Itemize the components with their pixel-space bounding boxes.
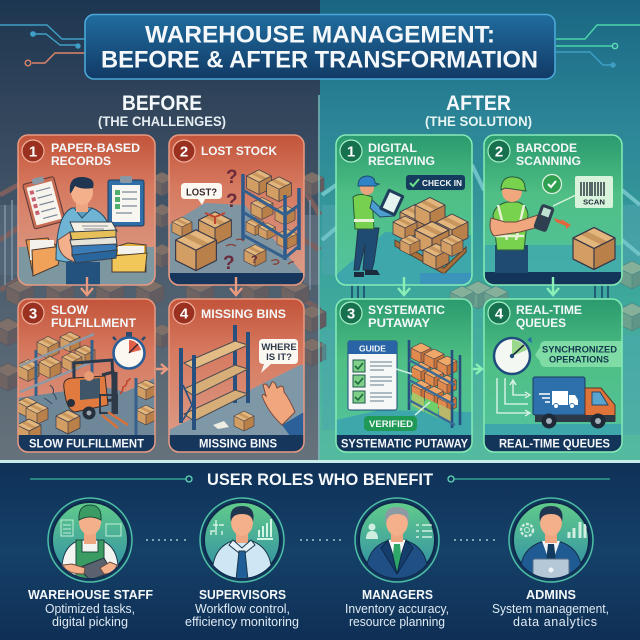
icon: delivery van — [539, 391, 578, 408]
hand — [262, 382, 304, 436]
icon: stopwatch — [113, 332, 145, 368]
number badge 3 — [22, 302, 44, 324]
number badge 1 — [22, 140, 44, 162]
number badge 4: 4 — [495, 306, 504, 322]
heading: after — [425, 92, 532, 129]
arrow: 2 to 4 — [230, 277, 242, 295]
shelf with orange boxes — [409, 340, 460, 428]
background warehouse: after side — [322, 165, 640, 435]
role description: Optimized tasks, — [45, 602, 135, 616]
panel: systematic putaway — [336, 299, 472, 452]
arrow: 1 to 3 — [81, 277, 93, 295]
panel outline — [18, 135, 155, 285]
panel title: REAL-TIME — [516, 303, 582, 317]
floor — [18, 378, 154, 435]
panel title: MISSING BINS — [201, 307, 286, 321]
callout: where is it: IS IT? — [266, 352, 292, 363]
heading: after: (THE SOLUTION) — [425, 114, 532, 129]
avatar: supervisor — [200, 498, 284, 590]
panel title: PUTAWAY — [368, 316, 430, 330]
panel title — [368, 303, 445, 330]
panel outline — [336, 299, 472, 452]
panel title: SCANNING — [516, 154, 581, 168]
arrow: after 1 to 3 — [398, 277, 410, 295]
panel title — [51, 141, 140, 168]
role description — [185, 602, 299, 629]
scan beam — [553, 195, 576, 206]
panel title: RECEIVING — [368, 154, 435, 168]
badge: check in — [406, 175, 465, 190]
flow arrows — [497, 378, 530, 416]
number badge 4 — [488, 302, 510, 324]
role label: ADMINS — [526, 588, 576, 602]
icon: left clipboard — [22, 173, 65, 229]
title banner: WAREHOUSE MANAGEMENT: — [145, 22, 495, 48]
small open box and paper — [213, 411, 254, 431]
bottom strip: MISSING BINS — [199, 438, 277, 450]
worker with paper stack — [56, 177, 117, 290]
role description: System management, — [492, 602, 609, 616]
heading: before — [98, 92, 226, 129]
heading accent left — [30, 476, 192, 482]
callout: lost — [181, 183, 222, 205]
background warehouse: before side — [0, 172, 326, 391]
bottom strip: REAL-TIME QUEUES — [499, 438, 610, 450]
avatar: manager — [355, 498, 439, 590]
question marks: ? — [223, 253, 235, 274]
panel title: SLOW — [51, 303, 89, 317]
question marks: ? — [226, 191, 238, 212]
role description — [492, 602, 609, 629]
icon: right clipboard — [108, 176, 144, 226]
callout: synchronized operations — [535, 341, 622, 367]
callout: synchronized operations: SYNCHRONIZED — [542, 344, 618, 354]
panel title — [51, 303, 137, 330]
number badge 4 — [173, 302, 195, 324]
floor — [18, 247, 155, 285]
icon: orange folder — [26, 238, 62, 276]
panel: paper-based records — [18, 135, 155, 290]
panel outline — [169, 135, 304, 285]
role description — [345, 602, 449, 629]
title banner: BEFORE & AFTER TRANSFORMATION — [101, 46, 538, 74]
panel title: QUEUES — [516, 316, 566, 330]
panel outline — [484, 299, 622, 452]
callout: where is it: WHERE — [261, 342, 297, 353]
number badge 3: 3 — [29, 306, 37, 322]
icon: dashboard clock — [494, 337, 532, 374]
guide document — [348, 341, 397, 410]
floor — [170, 203, 304, 277]
floor — [170, 365, 304, 435]
background: after side — [320, 0, 640, 460]
panel title — [516, 141, 581, 168]
panel outline — [336, 135, 472, 285]
empty shelf — [181, 325, 248, 430]
panel title: FULFILLMENT — [51, 316, 137, 330]
panel title: BARCODE — [516, 141, 577, 155]
role label: SUPERVISORS — [199, 588, 286, 602]
arrow: 3 to 4 — [156, 364, 167, 374]
connecting dots — [146, 539, 495, 541]
number badge 1: 1 — [29, 144, 37, 160]
panel outline — [484, 135, 622, 285]
question marks: ? — [251, 254, 258, 266]
role description: Workflow control, — [195, 602, 290, 616]
heading accent right — [448, 476, 610, 482]
forklift — [44, 360, 130, 428]
panel title — [368, 141, 435, 168]
bottom strip — [336, 435, 472, 452]
icon: green check — [542, 174, 562, 194]
shelf with boxes — [243, 170, 299, 260]
role: supervisors — [185, 498, 299, 629]
role label: WAREHOUSE STAFF — [28, 588, 153, 602]
badge: verified: VERIFIED — [369, 419, 413, 430]
number badge 2: 2 — [180, 144, 188, 160]
badge: check in: CHECK IN — [422, 178, 462, 188]
worker with tablet — [353, 176, 405, 277]
panel: slow fulfillment — [17, 299, 156, 452]
number badge 3: 3 — [347, 306, 355, 322]
heading: before: (THE CHALLENGES) — [98, 114, 226, 129]
number badge 1: 1 — [347, 144, 355, 160]
number badge 2: 2 — [495, 144, 503, 160]
role description: Inventory accuracy, — [345, 602, 449, 616]
bottom strip — [169, 435, 304, 452]
panel title: LOST STOCK — [201, 144, 277, 158]
callout: lost: LOST? — [186, 188, 217, 198]
panel title: SYSTEMATIC — [368, 303, 445, 317]
barcode scan tag — [575, 176, 613, 208]
role label: MANAGERS — [362, 588, 433, 602]
decorative circuit lines right — [556, 25, 640, 67]
background: before side — [0, 0, 320, 460]
panel: user roles band — [0, 463, 640, 640]
badge: verified — [364, 416, 417, 431]
boxes pile — [172, 212, 266, 271]
scuff marks — [226, 239, 294, 264]
pallet of boxes — [393, 198, 468, 274]
arrow: after 3 to 4 — [473, 364, 482, 374]
panel: barcode scanning — [484, 135, 622, 285]
avatar: admin — [509, 498, 593, 590]
floor — [336, 410, 472, 435]
loose boxes — [18, 396, 80, 435]
role: managers — [345, 498, 449, 629]
floor — [484, 424, 622, 436]
red arrow — [554, 218, 571, 229]
number badge 2 — [488, 140, 510, 162]
panel outline — [169, 299, 304, 452]
panel title: DIGITAL — [368, 141, 417, 155]
decorative circuit lines left — [0, 25, 85, 66]
worker with scanner — [490, 177, 555, 273]
heading: before: BEFORE — [122, 92, 202, 115]
number badge 1 — [340, 140, 362, 162]
panel outline — [18, 299, 155, 452]
truck — [533, 377, 615, 428]
guide document: GUIDE — [359, 344, 386, 354]
panel: lost stock — [169, 135, 304, 285]
role description: data analytics — [513, 615, 597, 629]
number badge 3 — [340, 302, 362, 324]
bottom strip — [485, 272, 621, 285]
number badge 2 — [173, 140, 195, 162]
bottom strip — [170, 273, 303, 285]
bottom strip — [18, 435, 155, 452]
panel: missing bins — [169, 299, 304, 452]
number badge 4: 4 — [180, 306, 189, 322]
role description: digital picking — [52, 615, 128, 629]
package — [573, 228, 615, 270]
arrow: after 2 to 4 — [547, 277, 559, 295]
floor — [484, 245, 622, 276]
background shelf — [17, 332, 156, 435]
panel: digital receiving — [336, 135, 472, 285]
divider between before and after — [318, 95, 320, 460]
role: warehouse staff — [28, 498, 153, 629]
avatar: warehouse staff — [48, 498, 132, 590]
bottom strip: SLOW FULFILLMENT — [29, 438, 144, 450]
bottom strip: SYSTEMATIC PUTAWAY — [341, 438, 468, 450]
question marks — [223, 167, 258, 274]
panel: real-time queues — [484, 299, 622, 452]
callout: where is it — [259, 339, 298, 373]
panel title: RECORDS — [51, 154, 111, 168]
icon: yellow folder — [112, 243, 147, 272]
panel title — [516, 303, 582, 330]
floor — [336, 232, 472, 285]
heading: user roles: USER ROLES WHO BENEFIT — [207, 470, 434, 489]
role description: resource planning — [349, 615, 445, 629]
role description: efficiency monitoring — [185, 615, 299, 629]
role description — [45, 602, 135, 629]
connector lines — [396, 369, 430, 415]
bottom right strip — [420, 273, 472, 285]
panel title: PAPER-BASED — [51, 141, 140, 155]
callout: synchronized operations: OPERATIONS — [549, 354, 609, 364]
title banner — [85, 14, 555, 79]
heading: after: AFTER — [446, 92, 511, 115]
bottom strip — [484, 435, 622, 452]
role: admins — [492, 498, 609, 629]
question marks: ? — [226, 167, 238, 188]
barcode scan tag: SCAN — [583, 198, 605, 206]
